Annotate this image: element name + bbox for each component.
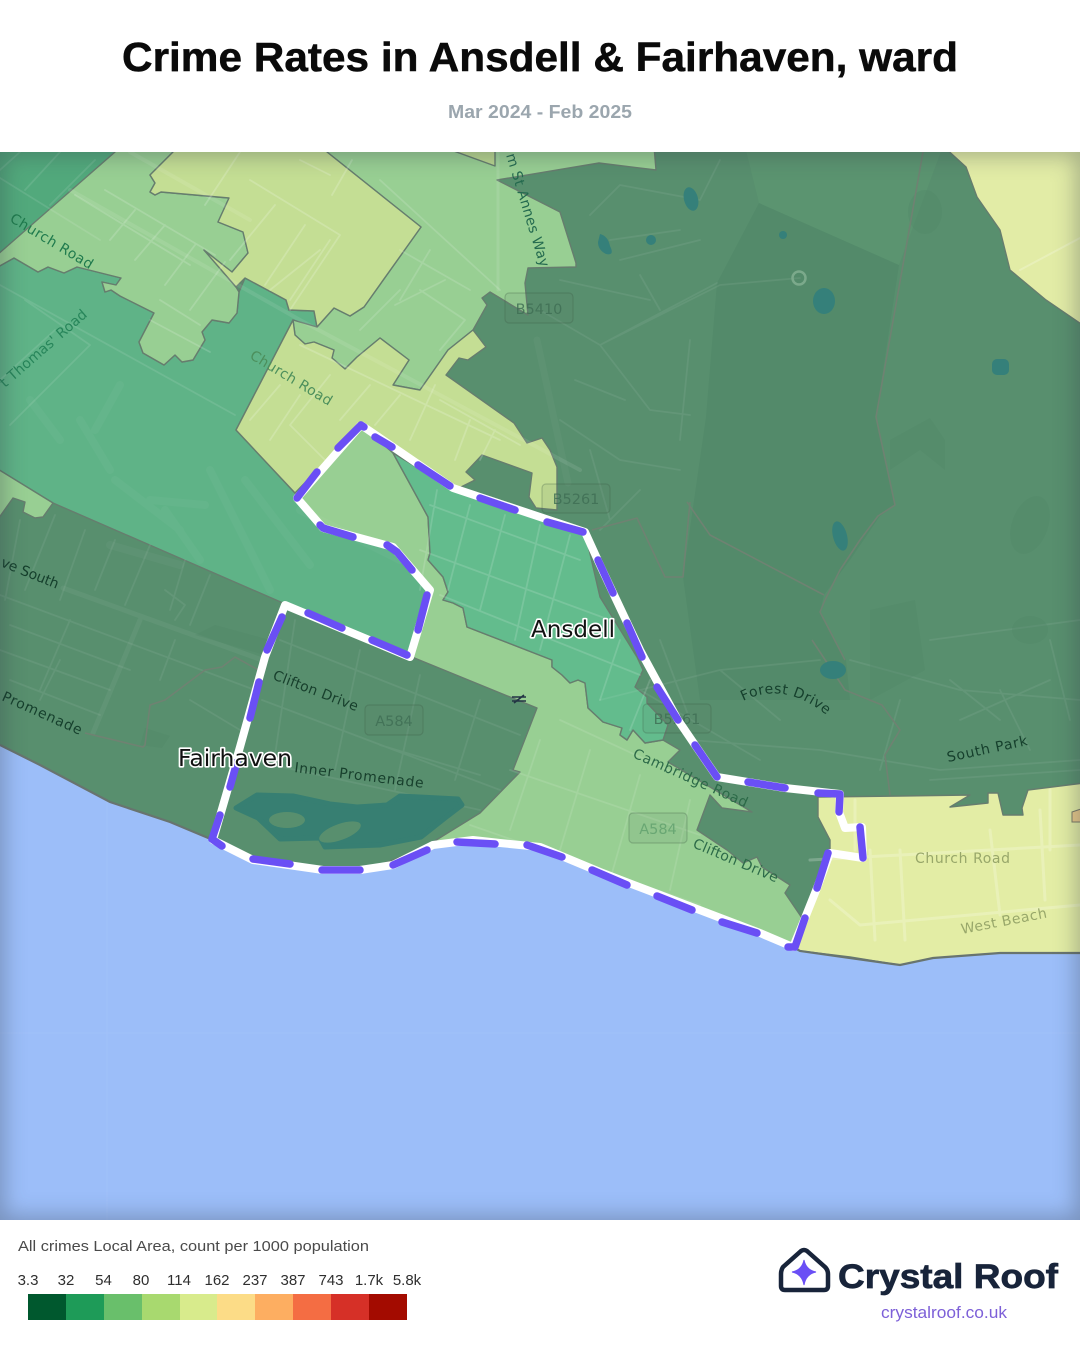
yellow green area: north	[150, 146, 421, 327]
legend scale labels: 1.7k	[355, 1272, 384, 1289]
road shield: A584 east	[629, 813, 687, 843]
label: Clifton Drive west: Clifton Drive	[271, 668, 360, 715]
legend scale labels: 54	[95, 1272, 112, 1289]
legend scale labels: 32	[58, 1272, 74, 1289]
small olive patch at top	[454, 152, 496, 167]
label: South Park: South Park	[946, 733, 1030, 766]
road labels	[0, 154, 1046, 942]
ward boundary: white casing	[213, 425, 863, 947]
road shield: A584 west: A584	[375, 714, 413, 730]
light green area: west edge	[0, 468, 53, 522]
yellow green area: church road	[236, 320, 557, 510]
subtitle: date range: Mar 2024 - Feb 2025	[448, 102, 632, 122]
sea	[0, 745, 1080, 1220]
legend title: All crimes Local Area, count per 1000 population	[18, 1238, 369, 1255]
label: West Beach: West Beach	[960, 906, 1048, 938]
boating lake	[236, 795, 462, 847]
label: Church Road centre: Church Road	[247, 348, 335, 409]
small orange patch	[1072, 808, 1080, 822]
pale yellow area: north east	[943, 146, 1080, 326]
legend scale labels: 80	[133, 1272, 149, 1289]
light green area: southern ward	[295, 425, 802, 955]
ponds	[598, 186, 1009, 679]
legend	[18, 1238, 422, 1320]
legend scale labels: 387	[280, 1272, 306, 1289]
icon: house with star	[781, 1250, 828, 1290]
label: Inner Promenade: Inner Promenade	[294, 760, 424, 792]
legend scale labels: 237	[242, 1272, 268, 1289]
website url: crystalroof.co.uk	[881, 1304, 1008, 1322]
Ansdell neighbourhood	[393, 453, 668, 743]
woodland patches	[263, 521, 832, 1273]
road shield: A584 west	[365, 705, 423, 735]
light green area: north centre	[0, 146, 248, 365]
darker parkland area	[683, 203, 899, 700]
coastline	[0, 745, 1080, 965]
road shield: B5261 north: B5261	[553, 492, 599, 508]
legend scale labels: 5.8k	[393, 1272, 422, 1289]
lighter northern strip	[745, 146, 943, 265]
label: Church Road north west: Church Road	[7, 211, 96, 273]
legend colour bar	[28, 1294, 407, 1320]
map edge vignette	[0, 152, 1080, 1220]
ward boundary: purple dashes	[212, 425, 863, 947]
road shield: B5261 south: B5261	[654, 712, 700, 728]
road shield: B5410	[505, 293, 573, 323]
place label: Ansdell: Ansdell	[531, 617, 615, 643]
golf course fairways	[30, 385, 400, 590]
label: Church Road east: Church Road	[915, 851, 1010, 867]
mid green area: west	[0, 259, 426, 651]
road shield: B5410: B5410	[516, 302, 562, 318]
label: Forest Drive: Forest Drive	[740, 684, 830, 714]
roundabout	[792, 272, 806, 284]
legend scale labels: 743	[318, 1272, 344, 1289]
legend scale labels: 162	[204, 1272, 230, 1289]
label: ve South: ve South	[0, 555, 61, 593]
label: St Annes Way: m St Annes Way	[502, 151, 552, 269]
road shield: A584 east: A584	[639, 822, 677, 838]
logo: Crystal Roof	[781, 1250, 1059, 1322]
label: Cambridge Road: Cambridge Road	[630, 746, 750, 811]
label: Clifton Drive east: Clifton Drive	[690, 836, 780, 886]
wordmark: Crystal Roof	[838, 1258, 1059, 1296]
admin boundaries	[85, 152, 923, 795]
road shield: B5261 south	[643, 704, 711, 733]
title: Crime Rates in Ansdell & Fairhaven, ward	[122, 34, 958, 80]
label: Promenade: Promenade	[0, 689, 84, 739]
place label: Fairhaven: Fairhaven	[178, 746, 292, 772]
map	[0, 152, 1080, 1220]
legend scale labels	[18, 1272, 422, 1289]
road shield: B5261 north	[542, 484, 610, 513]
legend scale labels: 114	[167, 1272, 191, 1289]
railway station icon	[512, 695, 526, 703]
pale yellow area: south east	[792, 783, 1080, 965]
legend scale labels: 3.3	[18, 1272, 38, 1289]
street network	[0, 152, 1080, 940]
